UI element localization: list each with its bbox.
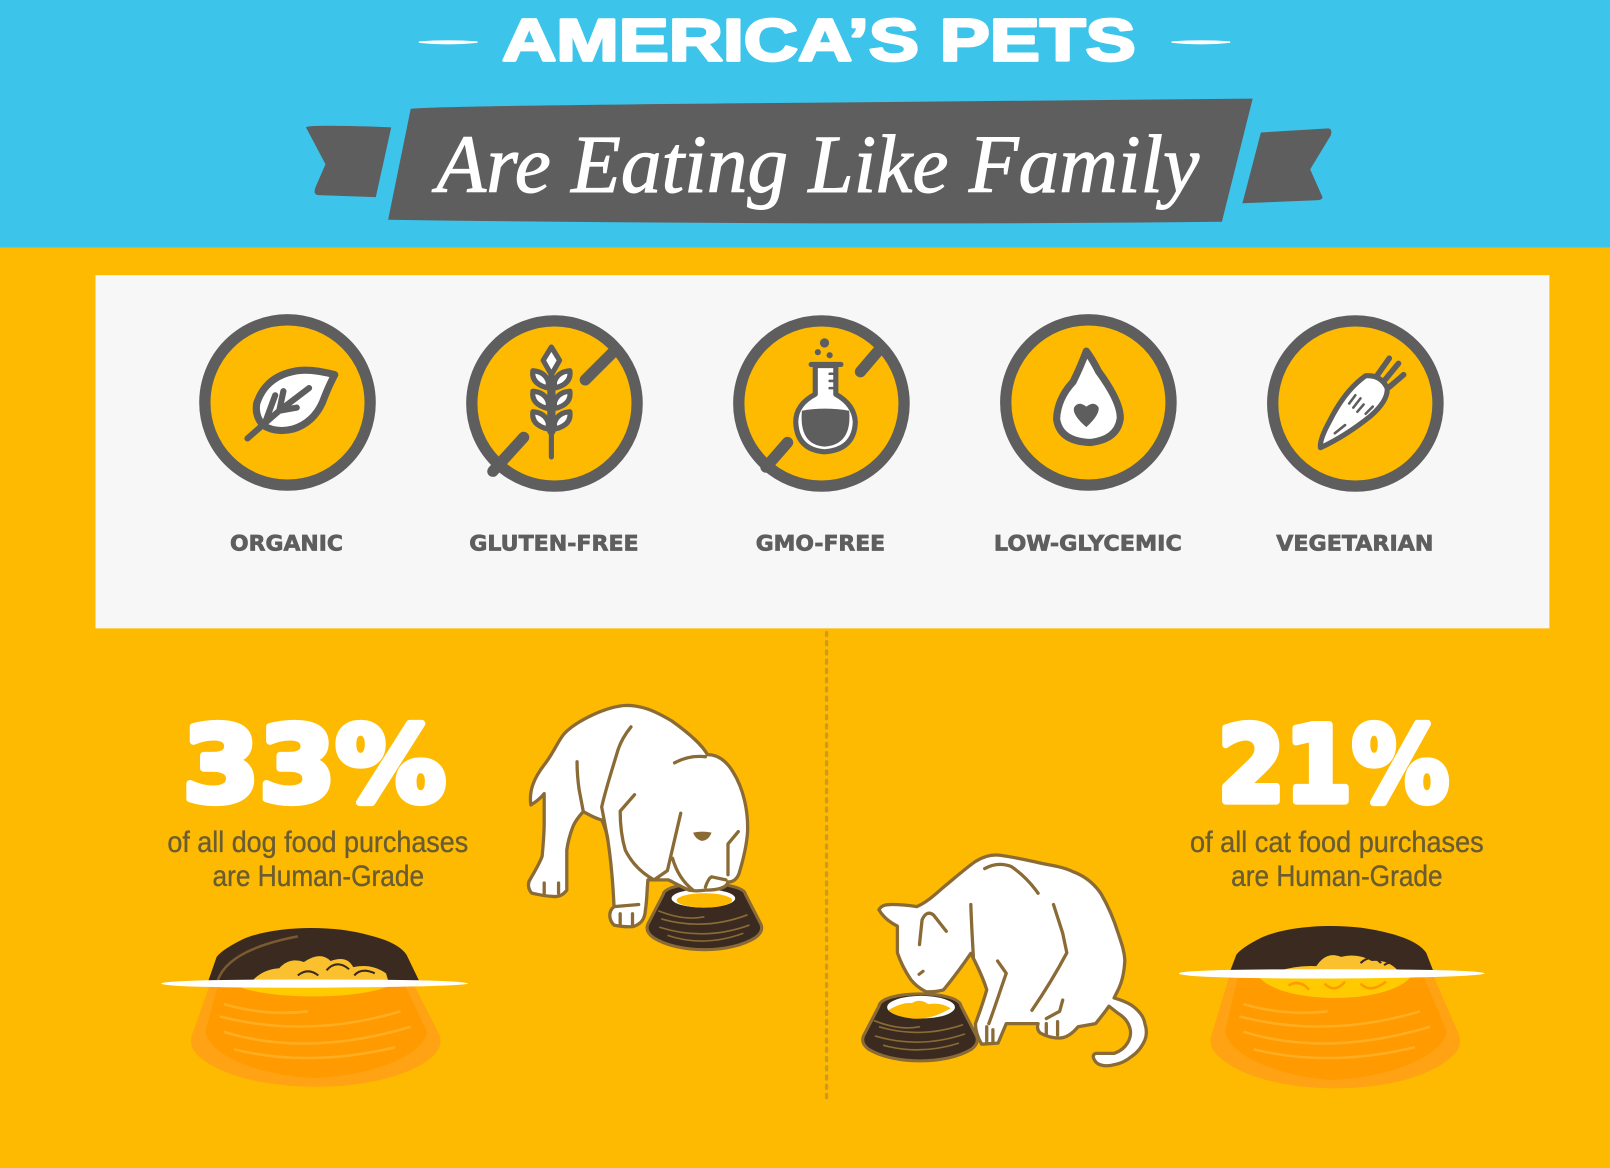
small cat bowl [863,994,977,1061]
dog body [528,705,748,927]
text: human-grade cat: are Human-Grade [1231,861,1443,893]
filled bowl part [208,928,419,981]
icon: gmo-free flask [739,321,904,486]
cat body [879,855,1146,1066]
label: gmo-free: GMO-FREE [756,531,885,556]
ribbon main panel [388,99,1253,223]
ribbon right tail [1242,128,1331,203]
dog detail lines [544,727,738,925]
unfilled bowl part [191,983,440,1087]
dog eye [693,832,712,841]
title dash left [419,41,477,44]
stat: 21% cats [1190,704,1484,893]
filled bowl part [1230,926,1433,971]
cat eye [919,971,923,974]
header band [0,0,1610,247]
text: dog food purchases: of all dog food purchases [167,827,468,859]
small dog bowl [647,883,762,950]
panel: food attributes [95,275,1549,628]
illustration: cat eating [863,855,1146,1066]
food [1278,955,1398,971]
dotted divider [825,632,828,1101]
bowl chart: 33% dog [161,928,468,1087]
icon: vegetarian carrot [1273,321,1438,486]
icon: gluten-free wheat [472,321,637,486]
ribbon banner [306,99,1331,223]
number: 33%: 33% [183,704,446,826]
unfilled bowl part [1211,973,1460,1088]
title: America's Pets: AMERICA’S PETS [502,7,1136,74]
food [253,956,388,981]
stat: 33% dogs [167,704,468,893]
text: human-grade dog: are Human-Grade [213,861,424,893]
ribbon left tail [306,126,391,197]
white level line [1179,969,1485,978]
label: organic: ORGANIC [230,531,343,556]
white level line [161,979,468,988]
label: vegetarian: VEGETARIAN [1276,531,1433,556]
illustration: dog eating [528,705,762,950]
label: low-glycemic: LOW-GLYCEMIC [994,531,1182,556]
label: gluten-free: GLUTEN-FREE [469,531,639,556]
icon: organic leaf [205,320,370,485]
subtitle: Are Eating Like Family: Are Eating Like Family [431,119,1200,210]
icon: low-glycemic drop [1006,320,1171,485]
bowl chart: 21% cat [1179,926,1485,1088]
text: cat food purchases: of all cat food purchases [1190,827,1484,859]
cat detail lines [919,864,1067,1043]
title dash right [1172,41,1230,44]
number: 21%: 21% [1218,704,1449,826]
